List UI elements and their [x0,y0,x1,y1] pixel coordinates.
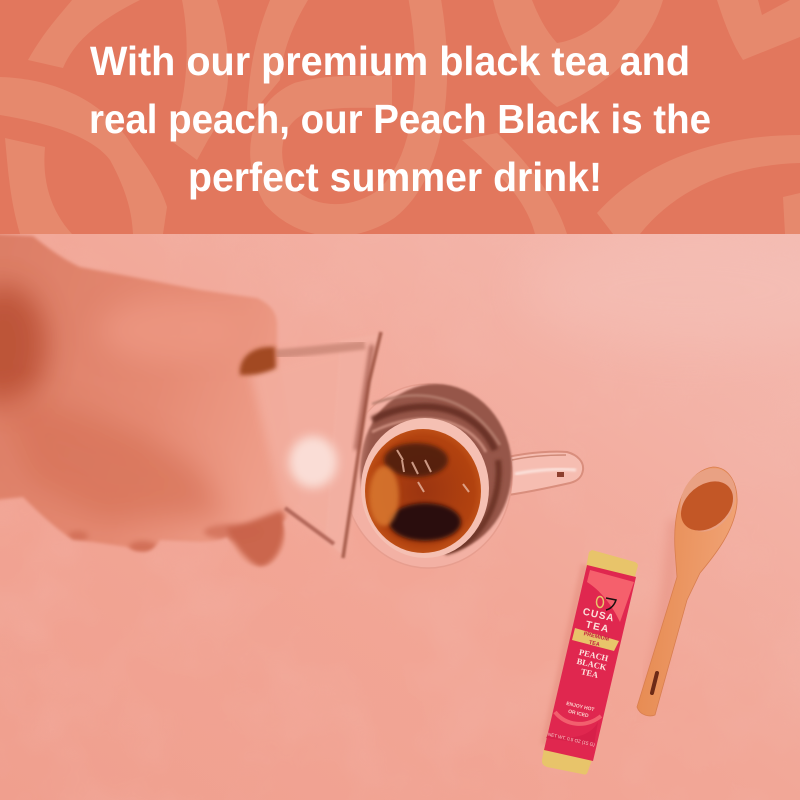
serving note: OR ICED [567,709,589,719]
hand holding glass [0,230,381,575]
title [89,38,711,200]
brand name: CUSA [582,607,616,625]
flavour name: TEA [580,666,600,680]
sachet body [544,565,636,761]
mug rim [360,384,512,554]
mug handle [508,452,583,495]
banner: coral header with swirl pattern [0,0,800,234]
flavour name: PEACH [578,647,610,663]
product sachet: Peach Black Tea [542,550,638,775]
brand name [582,607,616,636]
flavour name: BLACK [576,656,608,672]
tea [365,429,481,553]
title: With our premium black tea and [90,38,690,84]
mug body [344,384,512,568]
flavour name [576,647,610,680]
drinking glass [250,364,373,510]
serving note [566,701,595,719]
mug inner [361,418,489,558]
photo background: peach surface [0,230,800,800]
logo mark [596,596,616,610]
premium tea band: PREMIUM [583,631,610,643]
wooden spoon with cinnamon powder [637,459,746,716]
title: real peach, our Peach Black is the [89,96,711,142]
serving note: ENJOY HOT [566,701,595,713]
mug of tea [344,384,583,568]
hand [0,234,288,568]
title: perfect summer drink! [188,154,602,200]
brand name: TEA [584,619,611,636]
premium tea band [572,628,619,651]
net weight: NET WT. 0.5 OZ (15 G) [547,732,596,747]
sachet top and bottom seals [586,550,638,580]
premium tea band: TEA [588,640,600,648]
